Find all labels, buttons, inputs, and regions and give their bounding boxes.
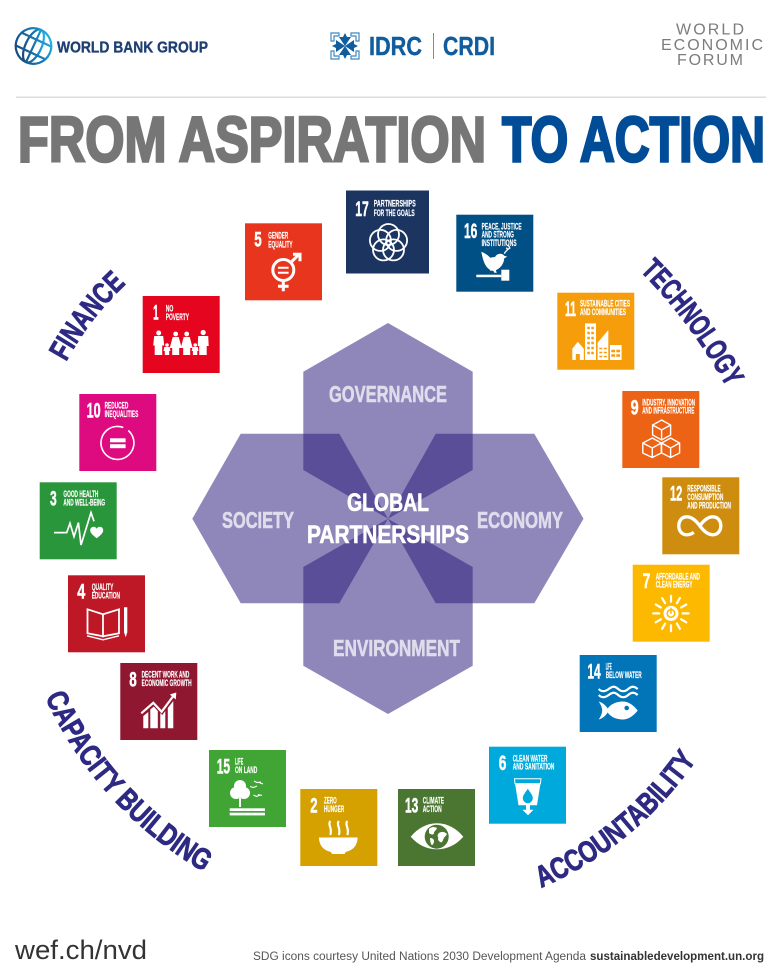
SDG 1 tile: NO (166, 303, 173, 313)
icon: equals in circle (101, 426, 134, 459)
icon: bowl with steam (319, 821, 358, 854)
SDG 4 tile (68, 575, 145, 652)
SDG 15 tile: ON LAND (235, 765, 257, 775)
curved label: technology: TECHNOLOGY (642, 256, 746, 384)
label: economy: ECONOMY (477, 507, 563, 533)
logo: IDRC CRDI: IDRC (369, 31, 422, 61)
logo: IDRC CRDI (331, 31, 495, 61)
SDG 2 tile: ZERO (324, 796, 337, 806)
label: society: SOCIETY (222, 507, 294, 533)
label: environment: ENVIRONMENT (333, 635, 460, 661)
curved label: finance: FINANCE (48, 270, 126, 362)
SDG 15 tile (209, 750, 286, 827)
icon: waves and fish (599, 687, 638, 720)
SDG 6 tile: CLEAN WATER (513, 753, 548, 763)
SDG 12 tile: AND PRODUCTION (687, 500, 731, 510)
SDG 4 tile: 4 (77, 581, 86, 604)
SDG 10 tile: 10 (87, 399, 101, 422)
SDG 16 tile: PEACE, JUSTICE (482, 221, 522, 231)
SDG 7 tile: AFFORDABLE AND (656, 571, 700, 581)
curved label: capacity building: CAPACITY BUILDING (47, 691, 212, 870)
icon: tree and birds (230, 780, 265, 815)
icon: buildings (572, 323, 622, 360)
panel: governance hexagon (303, 323, 473, 519)
SDG 16 tile (456, 215, 533, 292)
SDG 17 tile: FOR THE GOALS (374, 208, 415, 218)
SDG 5 tile (245, 223, 322, 300)
SDG 6 tile: AND SANITATION (513, 762, 554, 772)
SDG 14 tile: BELOW WATER (606, 670, 642, 680)
footer: short URL: wef.ch/nvd (14, 935, 147, 965)
SDG 4 tile: QUALITY (92, 582, 113, 592)
icon: globe (10, 22, 57, 70)
SDG 9 tile: AND INFRASTRUCTURE (642, 406, 694, 416)
curved label: accountability: ACCOUNTABILITY (538, 748, 694, 888)
footer: credit (253, 951, 764, 963)
SDG 11 tile: AND COMMUNITIES (580, 307, 626, 317)
SDG 10 tile: REDUCED (105, 401, 128, 411)
icon: family (153, 330, 209, 355)
SDG 3 tile: 3 (50, 488, 57, 511)
SDG 11 tile: SUSTAINABLE CITIES (580, 299, 630, 309)
SDG 17 tile: 17 (355, 198, 369, 221)
SDG 9 tile: 9 (631, 396, 639, 419)
SDG 5 tile: GENDER (268, 231, 289, 241)
icon: eye with globe (411, 823, 463, 849)
diagram: global partnerships hexagons (192, 323, 584, 714)
icon: growth chart (141, 692, 176, 728)
SDG 4 tile: EDUCATION (92, 590, 120, 600)
logo: World Bank Group (10, 22, 208, 70)
SDG 1 tile (143, 296, 220, 373)
logo: World Economic Forum: FORUM (677, 52, 743, 69)
SDG 15 tile: 15 (217, 755, 230, 778)
SDG 2 tile: 2 (310, 794, 318, 817)
SDG 2 tile (300, 789, 377, 866)
title: FROM ASPIRATION (18, 104, 486, 176)
label: global partnerships: PARTNERSHIPS (307, 521, 469, 549)
panel: environment hexagon (303, 519, 473, 714)
SDG 6 tile (489, 747, 566, 824)
SDG 11 tile (557, 293, 634, 370)
SDG 5 tile: EQUALITY (268, 239, 293, 249)
SDG 1 tile: 1 (153, 301, 159, 324)
label: global partnerships: GLOBAL (347, 489, 429, 517)
SDG 10 tile (79, 394, 156, 471)
SDG 7 tile: 7 (643, 570, 650, 593)
icon: rings (370, 224, 407, 260)
icon: sun and power (653, 596, 689, 631)
SDG 14 tile (580, 655, 657, 732)
SDG 9 tile (622, 391, 699, 468)
label: global partnerships (307, 489, 469, 549)
SDG 3 tile (40, 482, 117, 559)
icon: cubes (643, 420, 680, 458)
SDG 7 tile: CLEAN ENERGY (656, 580, 692, 590)
SDG 13 tile: CLIMATE (423, 796, 444, 806)
SDG 13 tile: ACTION (423, 804, 442, 814)
SDG 14 tile: 14 (587, 660, 601, 683)
panel: economy hexagon (388, 434, 584, 603)
icon: IDRC star (331, 33, 359, 59)
SDG 11 tile: 11 (565, 298, 576, 321)
icon: gender equality (273, 254, 300, 291)
footer: credit: SDG icons courtesy United Nations 2030 Development Agenda (253, 951, 587, 963)
SDG 14 tile: LIFE (606, 662, 612, 672)
SDG 6 tile: 6 (499, 752, 506, 775)
logo: World Economic Forum: WORLD (676, 22, 744, 38)
SDG 16 tile: AND STRONG (482, 230, 514, 240)
SDG 9 tile: INDUSTRY, INNOVATION (642, 398, 695, 408)
SDG 17 tile: PARTNERSHIPS (374, 198, 416, 208)
SDG 17 tile (346, 190, 429, 274)
SDG 8 tile: ECONOMIC GROWTH (142, 678, 192, 688)
logo: World Economic Forum (661, 22, 763, 69)
SDG 12 tile: 12 (670, 483, 682, 506)
SDG 1 tile: POVERTY (166, 312, 189, 322)
SDG 8 tile: DECENT WORK AND (142, 670, 189, 680)
icon: pulse and heart (54, 513, 103, 545)
SDG 8 tile: 8 (129, 668, 137, 691)
SDG 2 tile: HUNGER (324, 804, 345, 814)
logo: World Bank Group: WORLD BANK GROUP (57, 39, 208, 56)
SDG 13 tile: 13 (405, 794, 418, 817)
SDG 10 tile: INEQUALITIES (105, 409, 138, 419)
SDG 5 tile: 5 (254, 229, 262, 252)
SDG 12 tile: CONSUMPTION (687, 492, 723, 502)
icon: infinity (679, 517, 721, 535)
icon: book and pencil (87, 607, 127, 640)
SDG 16 tile: INSTITUTIONS (482, 238, 517, 248)
footer: credit: sustainabledevelopment.un.org (590, 951, 764, 963)
label: governance: GOVERNANCE (329, 381, 447, 407)
SDG 3 tile: AND WELL-BEING (63, 497, 105, 507)
logo: IDRC CRDI: CRDI (443, 31, 495, 61)
SDG 12 tile (662, 477, 739, 554)
SDG 12 tile: RESPONSIBLE (687, 483, 721, 493)
panel: society hexagon (192, 434, 388, 603)
logo: World Economic Forum: ECONOMIC (661, 37, 763, 54)
SDG 3 tile: GOOD HEALTH (63, 489, 98, 499)
SDG 13 tile (398, 789, 475, 866)
icon: dove and gavel (476, 246, 510, 281)
icon: water glass (514, 779, 541, 815)
SDG 7 tile (633, 565, 710, 642)
SDG 15 tile: LIFE (235, 757, 243, 767)
SDG 8 tile (120, 663, 197, 740)
SDG 16 tile: 16 (464, 220, 477, 243)
